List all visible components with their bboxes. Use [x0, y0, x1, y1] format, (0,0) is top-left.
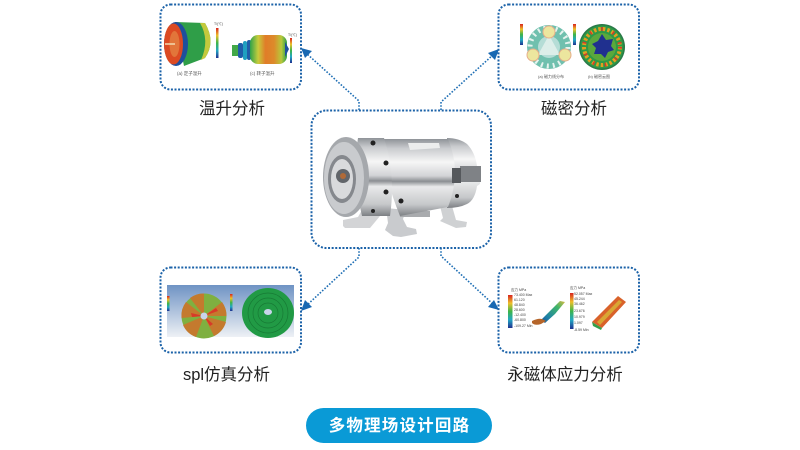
front collar [356, 138, 392, 216]
stator colour scale [214, 22, 223, 58]
right stress legend values: 应力 MPa [570, 285, 585, 290]
left simulation background [167, 285, 228, 337]
right stress legend values: 1.097 [574, 321, 583, 325]
right flux map [579, 24, 625, 70]
left spl disc result [181, 293, 227, 338]
thermal sub-captions: (a) 定子温升 [177, 70, 202, 77]
right stress colour scale [570, 293, 574, 329]
right spl disc result [242, 288, 294, 338]
panel: motor product [312, 110, 491, 248]
stator thermal model [164, 22, 210, 66]
connecting bracket [400, 211, 430, 217]
right colour scale [230, 294, 232, 311]
left stress legend values: 61.120 [514, 298, 525, 302]
right flux colour scale [573, 24, 576, 45]
left flux colour scale [520, 24, 523, 45]
right stress legend values: 45.244 [574, 297, 585, 301]
left colour scale [167, 296, 170, 311]
left foot [343, 210, 380, 228]
left stress legend values [511, 287, 533, 328]
right foot [440, 206, 467, 228]
button: multi-physics design loop: 多物理场设计回路 [329, 415, 470, 435]
icon: motor photograph [323, 137, 481, 237]
heading: spl simulation: spl仿真分析 [183, 365, 270, 384]
left stress legend values: -109.27 Min [514, 324, 533, 328]
button: multi-physics design loop [306, 408, 492, 443]
left stress legend values: 73.400 Max [514, 293, 533, 297]
arrow: centre to magnet stress panel [441, 248, 499, 310]
front flange [323, 137, 369, 217]
rotor colour scale [288, 33, 297, 63]
main cylinder [383, 139, 455, 216]
thermal sub-captions: (c) 转子温升 [250, 70, 275, 77]
right stress legend values: -8.59 Min [574, 328, 589, 332]
flux sub-captions [538, 73, 610, 79]
arrow: centre to thermal panel [301, 48, 359, 110]
left magnet stress model [532, 301, 565, 325]
bolts [370, 140, 459, 213]
rotor colour scale: T/(℃) [288, 33, 297, 37]
middle foot [385, 208, 417, 237]
arrow: centre to flux density panel [441, 49, 499, 110]
right stress legend values [570, 285, 593, 332]
right stress legend values: 36.462 [574, 302, 585, 306]
right stress legend values: 23.676 [574, 309, 585, 313]
right simulation background [228, 285, 294, 337]
stator colour scale: T/(℃) [214, 22, 223, 26]
right stress legend values: 10.979 [574, 315, 585, 319]
left stress colour scale [508, 295, 512, 328]
heading: flux density analysis: 磁密分析 [541, 99, 607, 118]
panel: spl simulation [160, 268, 301, 352]
panel: thermal analysis [160, 4, 301, 90]
flux sub-captions: (b) 磁密云图 [588, 73, 610, 79]
rotor thermal model [232, 35, 289, 64]
flux sub-captions: (a) 磁力线分布 [538, 73, 564, 79]
rear end housing [447, 138, 480, 208]
left stress legend values: -60.800 [514, 318, 526, 322]
window [452, 168, 461, 183]
left flux map [527, 25, 571, 69]
left stress legend values: -12.400 [514, 313, 526, 317]
arrow: centre to spl simulation panel [301, 248, 359, 311]
heading: thermal analysis: 温升分析 [199, 99, 265, 118]
left stress legend values: 48.840 [514, 303, 525, 307]
panel: flux density analysis [498, 4, 639, 90]
thermal sub-captions [177, 70, 275, 77]
panel: magnet stress analysis [498, 268, 639, 352]
right stress legend values: 52.057 Max [574, 292, 593, 296]
heading: magnet stress analysis: 永磁体应力分析 [507, 365, 623, 384]
right magnet stress model [592, 296, 626, 330]
left stress legend values: 28.600 [514, 308, 525, 312]
left stress legend values: 应力 MPa [511, 287, 526, 292]
